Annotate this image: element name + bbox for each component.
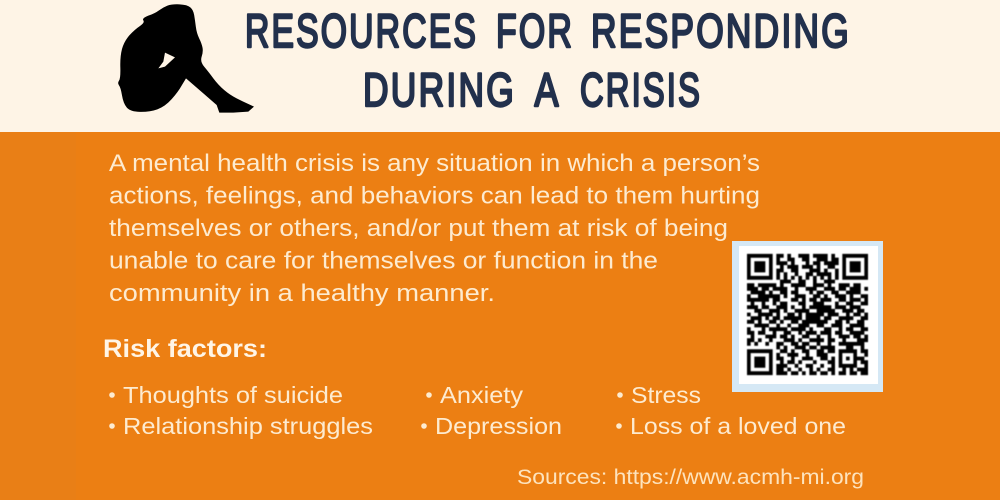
text block: crisis definition: A mental health crisis is any situation in which a person’s — [109, 150, 760, 177]
list: risk factors: Anxiety — [440, 382, 523, 408]
list: risk factors: Relationship struggles — [123, 413, 373, 439]
title: CRISIS — [580, 63, 702, 116]
list: risk factors — [109, 382, 846, 439]
text block: crisis definition: community in a healthy manner. — [109, 280, 495, 307]
source line: Sources: https://www.acmh-mi.org — [517, 465, 864, 489]
list: risk factors: Stress — [631, 382, 701, 408]
icon: silhouette of person sitting with head on knees — [118, 4, 254, 113]
text block: crisis definition: actions, feelings, and behaviors can lead to them hurting — [109, 182, 760, 210]
title: FOR — [496, 4, 574, 57]
text block: crisis definition — [109, 150, 760, 307]
text block: crisis definition: themselves or others, and/or put them at risk of being — [109, 215, 728, 242]
list: risk factors: Loss of a loved one — [630, 413, 846, 439]
title: A — [534, 63, 559, 116]
title — [245, 4, 851, 116]
title: DURING — [363, 63, 516, 116]
list: risk factors: Thoughts of suicide — [123, 382, 343, 408]
title: RESPONDING — [591, 4, 851, 57]
QR code — [732, 241, 883, 392]
panel: header band — [0, 0, 1000, 132]
heading: risk factors: Risk factors: — [103, 335, 267, 363]
title: RESOURCES — [245, 4, 478, 57]
text block: crisis definition: unable to care for themselves or function in the — [109, 248, 658, 274]
list: risk factors: Depression — [435, 413, 562, 439]
